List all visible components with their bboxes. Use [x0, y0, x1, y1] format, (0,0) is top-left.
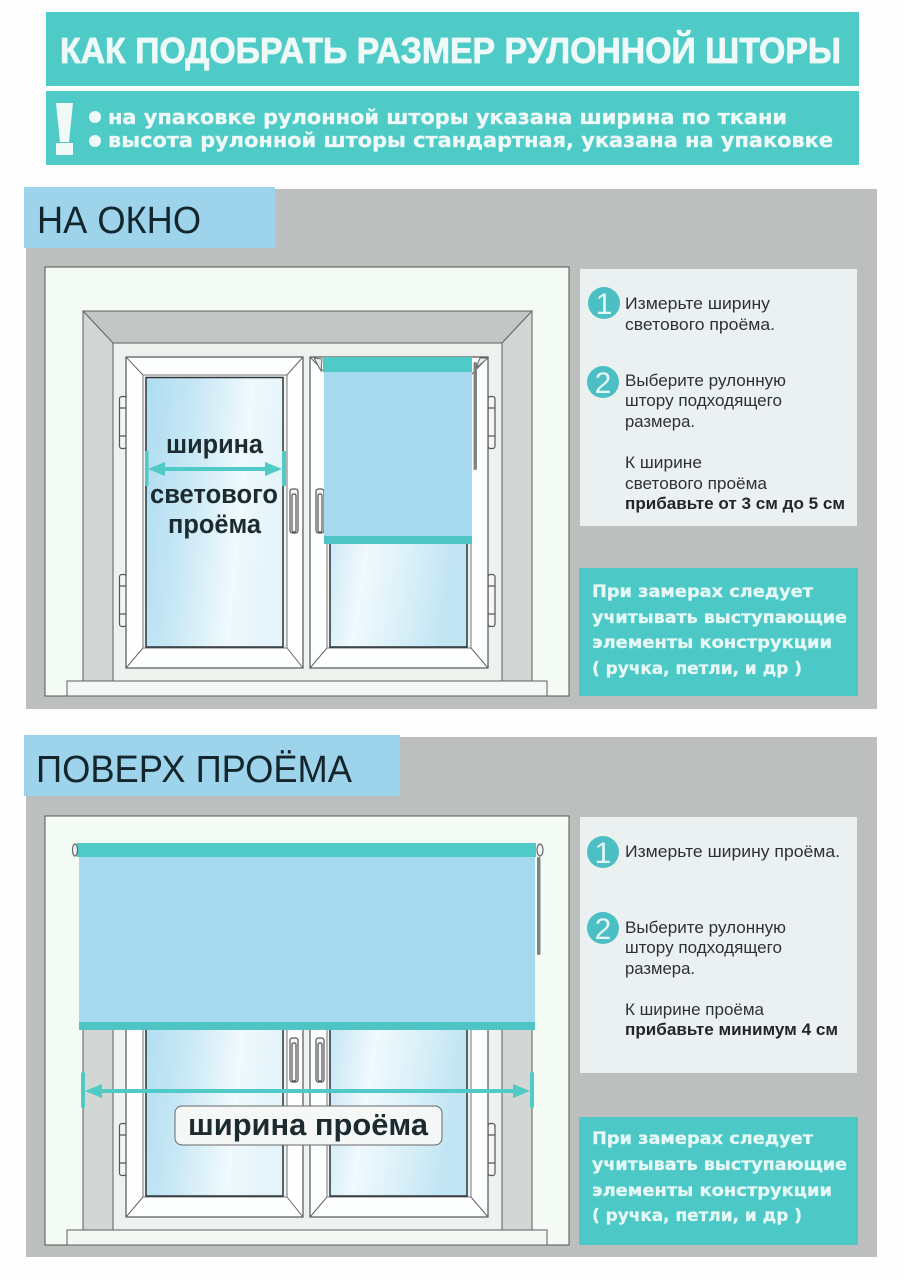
icon: exclamation mark	[56, 103, 73, 155]
step 2 number: 2	[595, 367, 611, 400]
label: light opening width: проёма	[168, 509, 262, 539]
step 2 text: Выберите рулонную	[625, 919, 786, 937]
step 1 number	[587, 836, 619, 870]
note card 1: ( ручка, петли, и др )	[592, 659, 802, 679]
title banner	[46, 12, 859, 86]
step 1 text	[625, 295, 775, 334]
note card 1: элементы конструкции	[592, 633, 832, 653]
heading: over the opening: ПОВЕРХ ПРОЁМА	[36, 749, 353, 791]
panel: on the window	[24, 187, 877, 709]
step 1 text: Измерьте ширину	[625, 295, 771, 313]
step 2 text: прибавьте от 3 см до 5 см	[625, 495, 845, 513]
step 1 number	[588, 287, 620, 321]
roller blind	[72, 843, 543, 1030]
step 2 text: штору подходящего	[625, 939, 782, 957]
note card 2: ( ручка, петли, и др )	[592, 1206, 802, 1226]
step 2 text: светового проёма	[625, 475, 768, 493]
note card 1	[579, 568, 858, 696]
label: opening width: ширина проёма	[188, 1107, 429, 1142]
step 2 text: прибавьте минимум 4 см	[625, 1021, 838, 1039]
note card 2: При замерах следует	[592, 1129, 813, 1149]
label: light opening width	[150, 429, 278, 539]
bullet 1: на упаковке рулонной шторы указана ширина по ткани	[108, 105, 787, 129]
step 2 number	[587, 912, 619, 946]
label: light opening width: светового	[150, 479, 278, 509]
step 2 number	[587, 366, 619, 400]
step 2 number: 2	[595, 913, 611, 946]
note card 2	[579, 1117, 858, 1245]
step 2 text: Выберите рулонную	[625, 372, 786, 390]
step 2 text: размера.	[625, 413, 695, 431]
title: КАК ПОДОБРАТЬ РАЗМЕР РУЛОННОЙ ШТОРЫ	[60, 29, 841, 71]
heading: on the window	[24, 187, 275, 248]
bullet 2: высота рулонной шторы стандартная, указана на упаковке	[108, 128, 833, 152]
arrow: light opening width	[145, 451, 286, 486]
step 2 text: К ширине	[625, 454, 702, 472]
step 1 text: Измерьте ширину проёма.	[625, 843, 840, 861]
step 2 text	[625, 919, 838, 1039]
step 2 text: К ширине проёма	[625, 1001, 765, 1019]
window diagram with blind	[45, 267, 569, 696]
note card 1: При замерах следует	[592, 582, 813, 602]
step 2 text	[625, 372, 845, 513]
window diagram with full blind	[45, 816, 569, 1245]
panel: over the opening	[24, 735, 877, 1257]
step 1 number: 1	[595, 837, 611, 870]
steps card 1	[580, 269, 857, 526]
label: light opening width: ширина	[166, 429, 264, 459]
note card 2: учитывать выступающие	[592, 1155, 847, 1175]
step 2 text: штору подходящего	[625, 392, 782, 410]
step 1 text: светового проёма.	[625, 316, 775, 334]
step 2 text: размера.	[625, 960, 695, 978]
arrow: opening width	[81, 1072, 534, 1108]
notice banner	[46, 91, 859, 165]
roller blind	[314, 357, 488, 544]
step 1 number: 1	[596, 288, 612, 321]
note card 2: элементы конструкции	[592, 1181, 832, 1201]
heading: over the opening	[24, 735, 400, 796]
note card 1: учитывать выступающие	[592, 608, 847, 628]
steps card 2	[580, 817, 857, 1073]
heading: on the window: НА ОКНО	[37, 200, 201, 242]
